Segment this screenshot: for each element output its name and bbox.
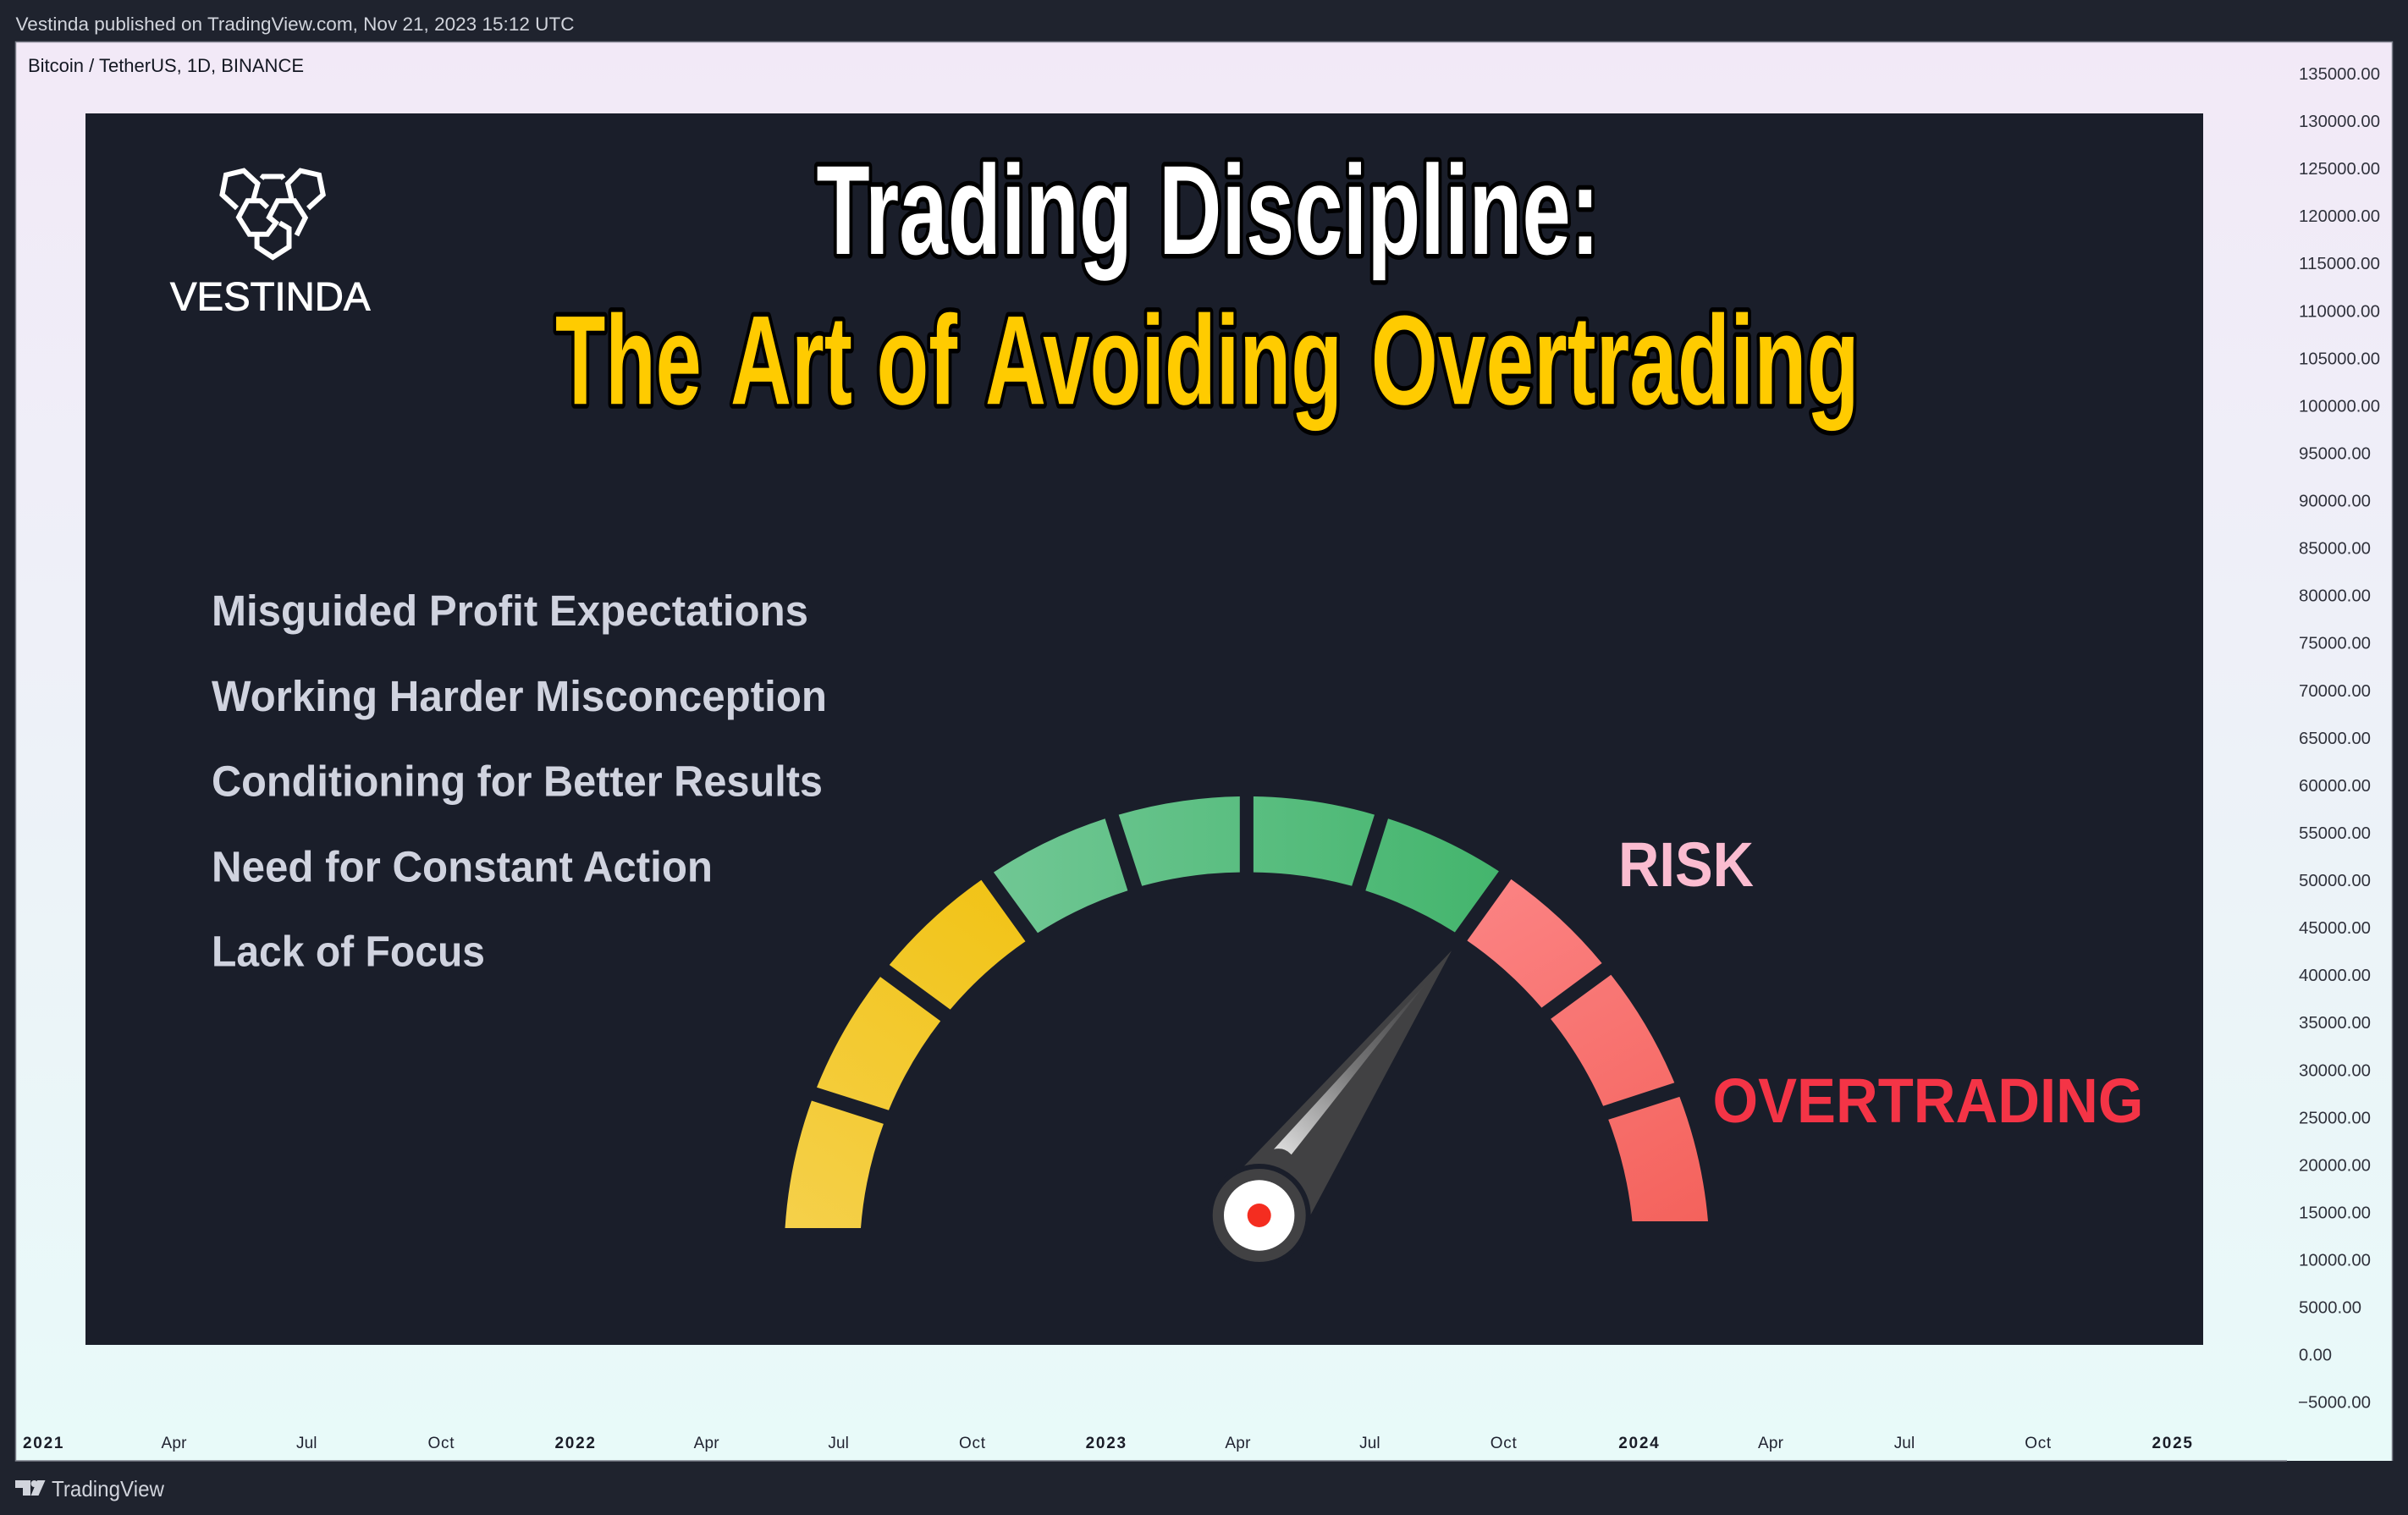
time axis: Oct <box>1491 1435 1518 1452</box>
title line 1: Discipline: <box>1159 139 1600 281</box>
price axis: 115000.00 <box>2299 255 2380 273</box>
title line 2: Avoiding <box>985 289 1342 431</box>
price axis: 30000.00 <box>2299 1061 2371 1080</box>
price axis: 105000.00 <box>2299 350 2380 368</box>
icon: Vestinda hexagon logo <box>222 171 323 257</box>
time axis: 2021 <box>23 1435 63 1452</box>
price axis: 85000.00 <box>2299 540 2371 559</box>
label: RISK: RISK <box>1618 829 1754 900</box>
label: OVERTRADING: OVERTRADING <box>1713 1066 2143 1136</box>
brand name: VESTINDA <box>170 274 371 318</box>
price axis: 90000.00 <box>2299 493 2371 511</box>
time axis: Oct <box>2025 1435 2052 1452</box>
time axis: Jul <box>1359 1435 1380 1452</box>
price axis: 50000.00 <box>2299 872 2371 890</box>
time axis: Apr <box>694 1435 719 1452</box>
list of overtrading causes: Need for Constant Action <box>212 843 713 891</box>
price axis: 35000.00 <box>2299 1014 2371 1033</box>
title line 2: Art <box>730 289 852 431</box>
time axis: Oct <box>959 1435 986 1452</box>
list of overtrading causes: Working Harder Misconception <box>212 672 827 720</box>
price axis: 25000.00 <box>2299 1109 2371 1127</box>
price axis: 40000.00 <box>2299 967 2371 985</box>
title line 1: Trading <box>816 139 1132 281</box>
gauge: needle and hub <box>1208 950 1452 1267</box>
price axis: 95000.00 <box>2299 445 2371 464</box>
price axis: 65000.00 <box>2299 730 2371 748</box>
price axis: 5000.00 <box>2299 1299 2361 1318</box>
price axis: 15000.00 <box>2299 1204 2371 1222</box>
price axis: 45000.00 <box>2299 919 2371 938</box>
title line 2 <box>555 289 1860 431</box>
time axis: Jul <box>828 1435 849 1452</box>
publication header: Vestinda published on TradingView.com, Nov 21, 2023 15:12 UTC <box>15 14 575 35</box>
price axis: 100000.00 <box>2299 397 2380 416</box>
price axis: 75000.00 <box>2299 635 2371 653</box>
symbol title: Bitcoin / TetherUS, 1D, BINANCE <box>28 55 304 76</box>
price axis: 0.00 <box>2299 1347 2332 1365</box>
TradingView footer logo: TradingView <box>52 1476 164 1501</box>
list of overtrading causes: Misguided Profit Expectations <box>212 587 808 635</box>
title line 1 <box>816 139 1600 281</box>
time axis: 2023 <box>1086 1435 1126 1452</box>
price axis: 135000.00 <box>2299 65 2380 84</box>
time axis: Apr <box>161 1435 187 1452</box>
panel: dark infographic card <box>85 113 2203 1345</box>
price axis: 20000.00 <box>2299 1156 2371 1175</box>
price axis: 125000.00 <box>2299 160 2380 179</box>
price axis: 110000.00 <box>2299 302 2380 321</box>
time axis: Jul <box>1894 1435 1915 1452</box>
price axis: −5000.00 <box>2298 1394 2371 1413</box>
time axis: Apr <box>1225 1435 1251 1452</box>
title line 2: of <box>877 289 958 431</box>
price axis: 10000.00 <box>2299 1251 2371 1270</box>
list of overtrading causes: Conditioning for Better Results <box>212 758 823 806</box>
time axis: Oct <box>428 1435 455 1452</box>
gauge: risk arc segments <box>785 796 1708 1228</box>
list of overtrading causes <box>212 587 827 976</box>
price axis: 130000.00 <box>2299 113 2380 131</box>
time axis <box>23 1435 2192 1452</box>
price axis: 120000.00 <box>2299 207 2380 226</box>
list of overtrading causes: Lack of Focus <box>212 928 485 976</box>
time axis: 2024 <box>1618 1435 1659 1452</box>
time axis: 2022 <box>555 1435 595 1452</box>
price axis: 70000.00 <box>2299 682 2371 701</box>
price axis: 60000.00 <box>2299 777 2371 796</box>
time axis: Apr <box>1758 1435 1784 1452</box>
time axis: Jul <box>296 1435 317 1452</box>
title line 2: The <box>555 289 702 431</box>
time axis: 2025 <box>2152 1435 2192 1452</box>
price axis: 55000.00 <box>2299 824 2371 843</box>
price axis <box>2298 65 2380 1413</box>
title line 2: Overtrading <box>1371 289 1860 431</box>
price axis: 80000.00 <box>2299 587 2371 606</box>
